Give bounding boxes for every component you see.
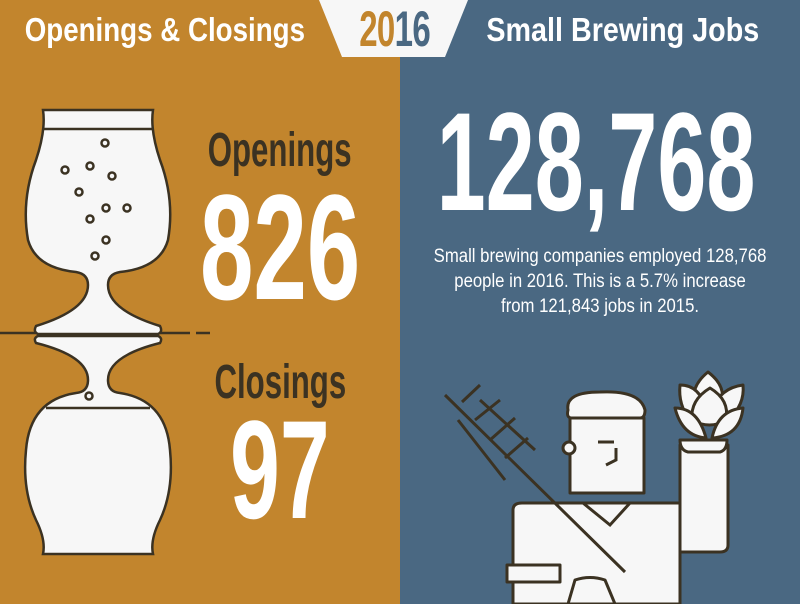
text: description: Small brewing companies employed 128,768 bbox=[434, 246, 766, 267]
text: description: from 121,843 jobs in 2015. bbox=[501, 296, 699, 317]
title: openings & closings: Openings & Closings bbox=[25, 11, 305, 48]
year: 20 bbox=[360, 1, 395, 57]
label: closings: Closings bbox=[214, 356, 346, 409]
year bbox=[360, 1, 430, 57]
text: description bbox=[434, 246, 766, 317]
label: openings: Openings bbox=[208, 124, 352, 177]
title: small brewing jobs: Small Brewing Jobs bbox=[487, 11, 759, 48]
number: 826: 826 bbox=[200, 163, 360, 331]
year: 16 bbox=[395, 1, 430, 57]
number: 97: 97 bbox=[230, 391, 330, 548]
icon: brewer with hop bbox=[444, 370, 745, 604]
text: description: people in 2016. This is a 5.7% increase bbox=[454, 271, 746, 292]
panel: right blue bbox=[400, 0, 800, 604]
number: 128,768: 128,768 bbox=[437, 83, 755, 240]
icon: glasses hourglass bbox=[0, 108, 210, 556]
header badge 2016 bbox=[319, 0, 468, 57]
